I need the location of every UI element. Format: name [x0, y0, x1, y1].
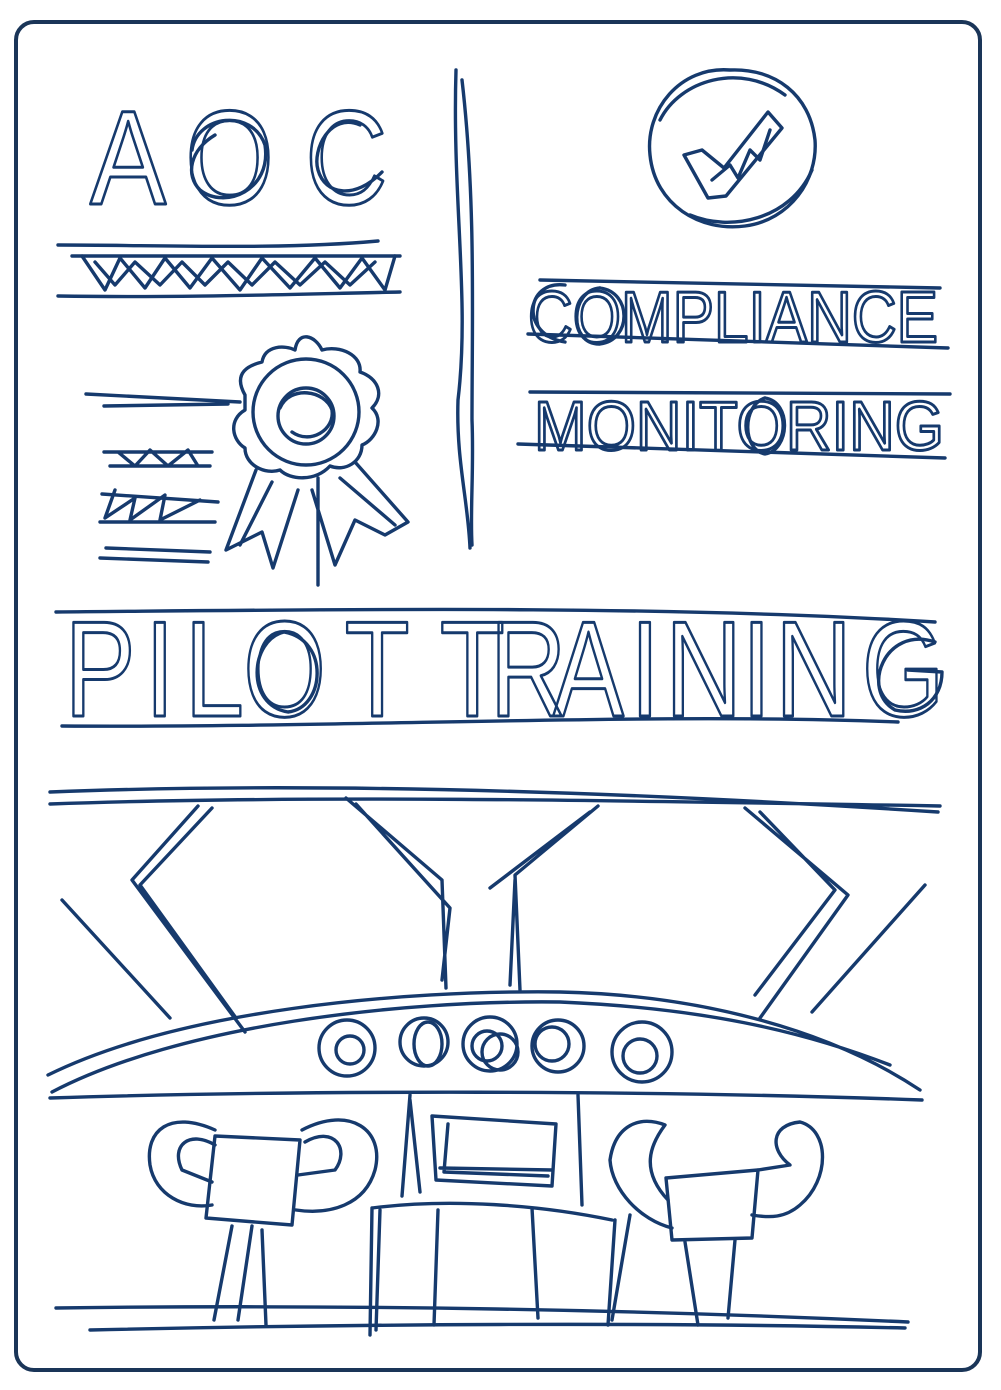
vertical divider	[455, 70, 473, 548]
pedestal table	[370, 1203, 615, 1335]
dashboard curves	[48, 992, 920, 1092]
text: MONITORING: MONITORING	[534, 387, 944, 465]
gauges	[319, 1017, 672, 1082]
left window frame	[62, 806, 245, 1032]
heading: AOC: AOC	[90, 83, 387, 233]
icon: award rosette	[226, 337, 408, 585]
right window frame	[745, 808, 925, 1018]
left seat	[149, 1120, 377, 1325]
right seat	[610, 1121, 822, 1325]
list lines beside rosette	[86, 394, 240, 562]
zigzag underline block	[58, 241, 400, 297]
heading: PILOT TRAINING: PILOT TRAINING	[65, 593, 944, 745]
text: COMPLIANCE: COMPLIANCE	[528, 278, 938, 358]
centre console and screen	[402, 1095, 582, 1205]
illustration: cockpit	[48, 788, 940, 1335]
centre pillars	[346, 798, 598, 990]
floor lines	[56, 1307, 908, 1330]
icon: check mark badge	[650, 70, 815, 227]
cockpit roof lines	[50, 788, 940, 812]
